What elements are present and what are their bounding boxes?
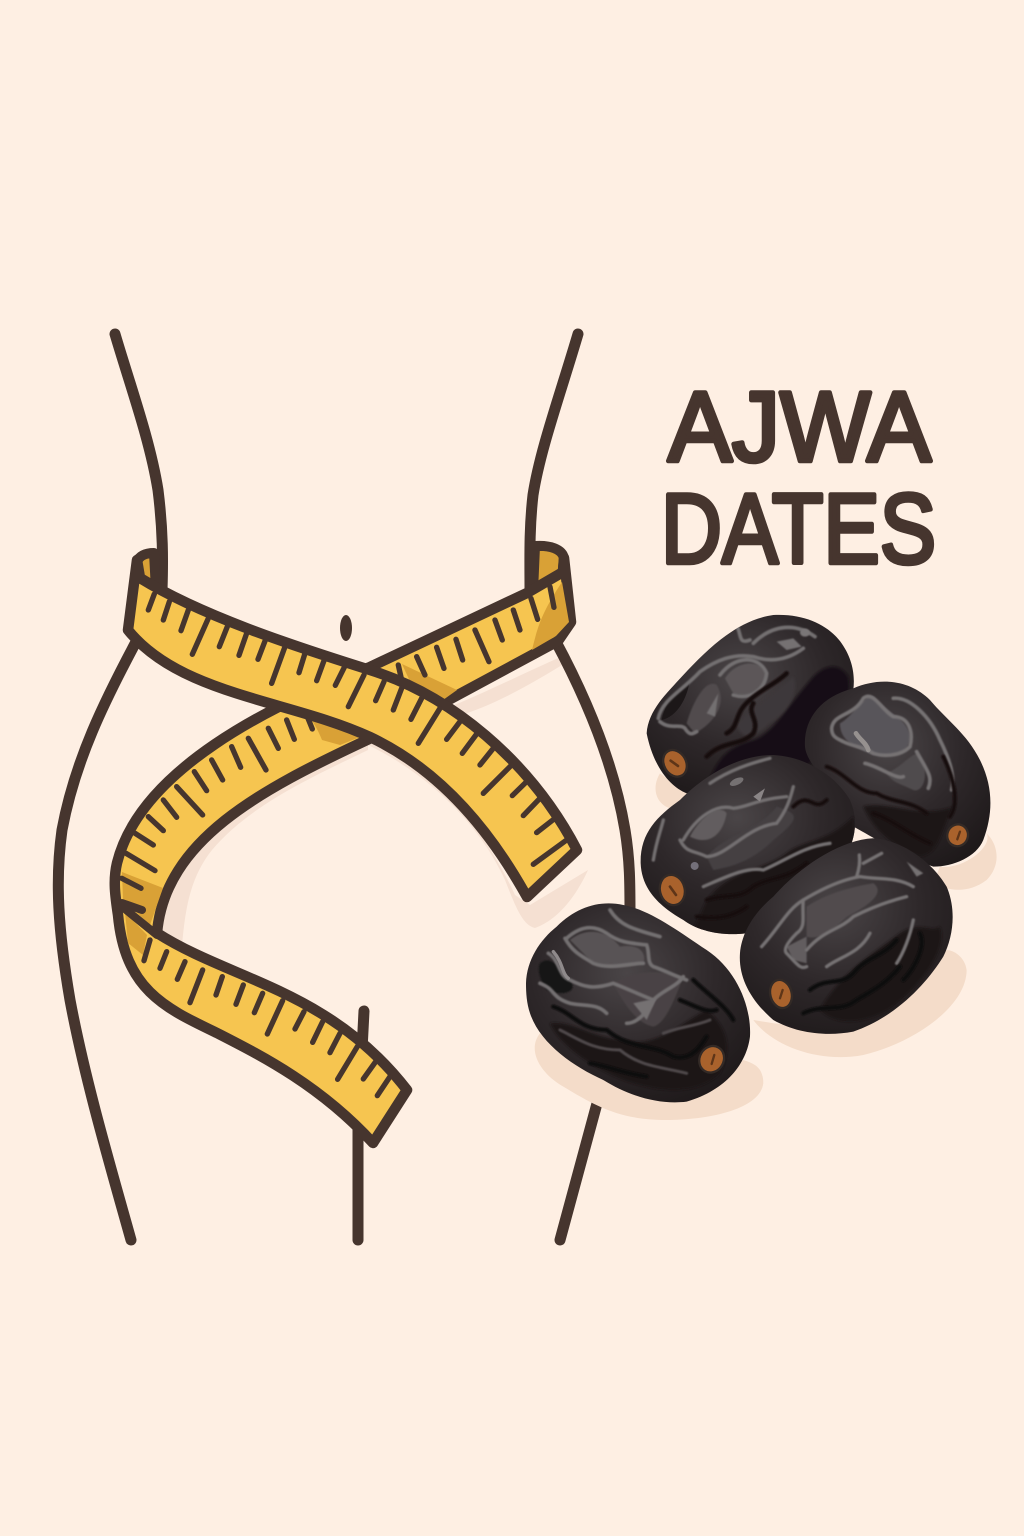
title: Ajwa Dates [661, 371, 936, 584]
surface wrinkles [762, 853, 941, 1021]
date: back right [805, 682, 990, 867]
navel [340, 615, 352, 641]
ajwa dates group [526, 615, 997, 1120]
date: front right [740, 838, 953, 1034]
date stem [658, 746, 692, 781]
left hip and leg line [58, 640, 137, 1240]
inner thigh line top [362, 1011, 364, 1050]
date shadows [535, 773, 997, 1120]
right leg line [560, 1085, 602, 1240]
tape back fold right [533, 546, 564, 592]
tape lower band ticks [122, 587, 554, 888]
date stem [767, 977, 795, 1011]
right hip line [555, 640, 630, 915]
title line 2: DATES [661, 473, 936, 584]
tape upper band [128, 560, 577, 897]
inner thigh line bottom [352, 1125, 364, 1240]
date: back left [647, 615, 854, 793]
tape fold line [120, 903, 157, 935]
surface wrinkles [827, 696, 955, 857]
tape back fold left [137, 553, 156, 590]
tape end ticks [144, 940, 390, 1096]
tape lower band [115, 558, 571, 1143]
date: center [641, 755, 855, 937]
tape upper band ticks [148, 594, 567, 864]
date stem [694, 1041, 729, 1077]
title line 1: AJWA [668, 371, 931, 482]
body outline [58, 334, 630, 1240]
tape shadows [156, 655, 588, 945]
infographic canvas [52, 328, 996, 1246]
right upper waist line [530, 334, 578, 590]
measuring tape [115, 546, 577, 1143]
left upper waist line [115, 334, 163, 590]
date stem [656, 872, 688, 908]
date: front left [526, 903, 750, 1102]
date stem [944, 821, 971, 849]
tape shading on lower band [122, 582, 569, 955]
surface wrinkles [539, 910, 733, 1090]
surface wrinkles [653, 758, 855, 937]
surface wrinkles [658, 620, 849, 787]
